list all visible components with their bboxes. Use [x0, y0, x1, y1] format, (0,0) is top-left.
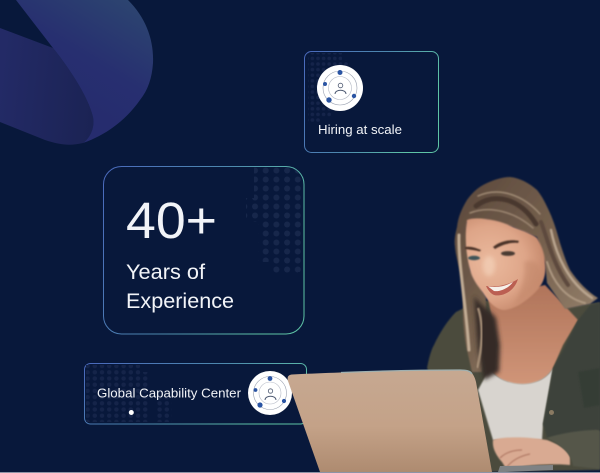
- icon: person in orbit: [317, 65, 363, 111]
- face: [466, 218, 545, 310]
- big number: 40+: [126, 192, 217, 249]
- small white dot: [129, 410, 134, 415]
- label: Hiring at scale: [318, 122, 402, 137]
- dotted map texture: [86, 365, 172, 422]
- smile: [486, 279, 518, 295]
- nose highlight: [483, 256, 495, 276]
- woman with laptop: [288, 177, 600, 472]
- light strand over jacket: [477, 308, 482, 368]
- card: 40+ years of experience: [104, 166, 304, 334]
- white top: [478, 368, 553, 440]
- finger shadows: [500, 450, 530, 468]
- dark hair under chin: [474, 296, 500, 380]
- eyebrows and eyes: [465, 240, 519, 260]
- hand and wrist: [493, 437, 570, 470]
- neck and chest: [488, 285, 578, 385]
- description: Experience: [126, 290, 234, 313]
- card: global capability center: [84, 364, 306, 424]
- description: Years of: [126, 261, 205, 284]
- label: Global Capability Center: [97, 386, 242, 400]
- decorative ribbon: [0, 0, 153, 145]
- dotted map texture: [246, 167, 303, 274]
- sleeve: [547, 430, 600, 469]
- laptop base: [498, 465, 553, 472]
- icon: person in orbit: [248, 371, 292, 415]
- hair: [455, 177, 598, 372]
- hair strands: [459, 192, 592, 350]
- description: [126, 261, 234, 313]
- cheek shading: [514, 261, 541, 305]
- right jacket panel with collar: [543, 303, 600, 438]
- dotted map texture: [308, 53, 350, 122]
- jacket button: [549, 410, 554, 415]
- card: hiring at scale: [304, 52, 438, 152]
- jacket: [427, 300, 600, 472]
- bottom edge strip: [0, 472, 600, 473]
- laptop lid: [288, 370, 492, 472]
- jacket pocket: [578, 368, 600, 408]
